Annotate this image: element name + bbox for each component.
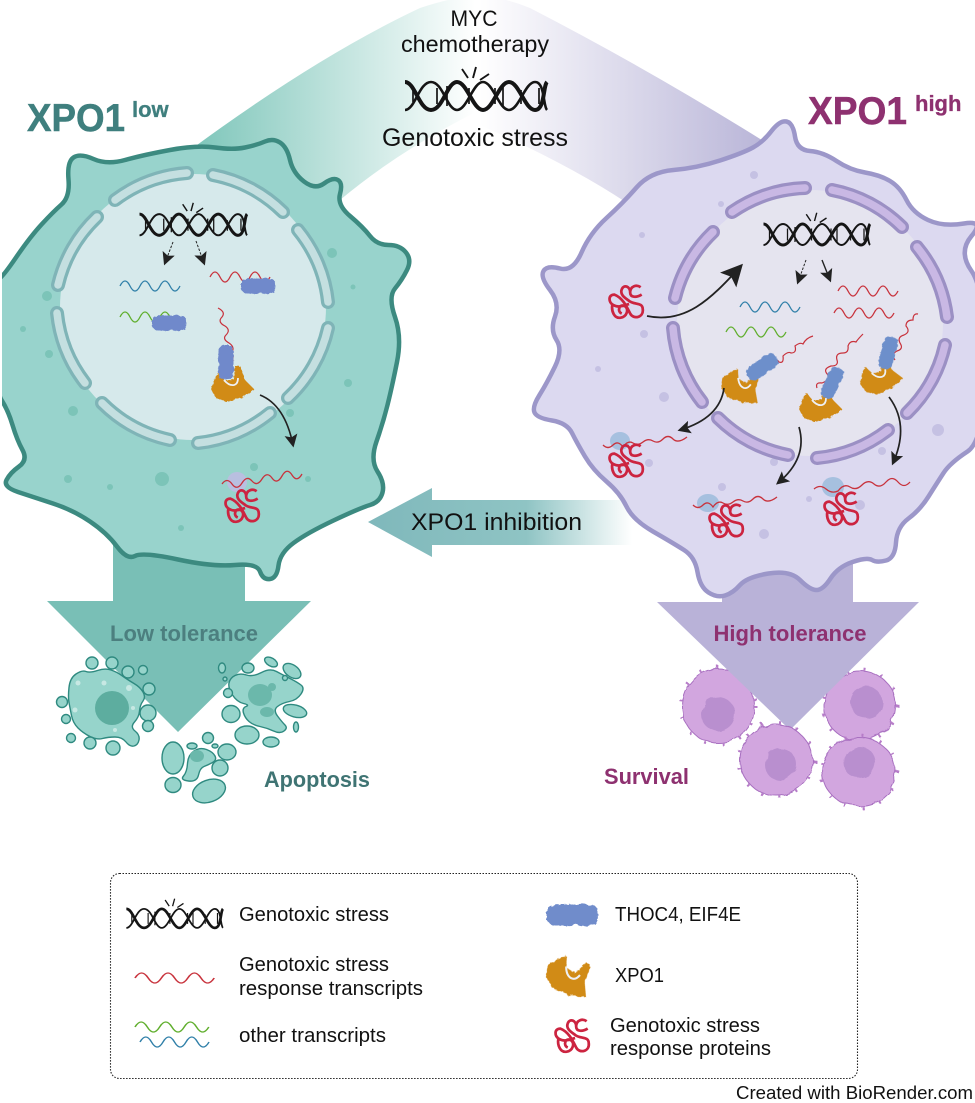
- icon: surviving cell 3: [738, 723, 814, 797]
- export complex 2: [799, 334, 863, 422]
- icon: surviving cell 1: [680, 667, 756, 745]
- label: High tolerance: High tolerance: [714, 621, 866, 646]
- cytoplasm vesicles: [595, 171, 944, 539]
- icon: apoptotic cell 3: [162, 732, 236, 807]
- title: XPO1 low: XPO1: [27, 97, 125, 140]
- label: Survival: Survival: [604, 764, 689, 789]
- title: XPO1 high: high: [915, 91, 961, 116]
- translated protein 3: [814, 477, 910, 525]
- icon: legend red transcript: [135, 973, 214, 983]
- stress band: teal arch to XPO1 low cell: [197, 0, 476, 200]
- legend text: THOC4, EIF4E: THOC4, EIF4E: [615, 904, 741, 926]
- heading: stress sources: [382, 6, 568, 152]
- icon: legend protein: [556, 1020, 589, 1052]
- arrow: XPO1 inhibition: XPO1 inhibition: [411, 509, 582, 536]
- translated protein 2: [693, 494, 777, 537]
- panel: XPO1 high cell: [534, 121, 975, 596]
- panel: XPO1 low cell: [0, 140, 409, 579]
- title: XPO1 high: XPO1: [808, 90, 907, 133]
- translated protein: [222, 471, 302, 522]
- arrows: export to cytoplasm: [680, 388, 901, 483]
- legend text: XPO1: XPO1: [615, 965, 664, 987]
- cell membrane: [0, 140, 409, 579]
- icon: damaged DNA (top): [405, 67, 547, 110]
- title: XPO1 low: low: [132, 97, 170, 122]
- heading: stress sources: Genotoxic stress: [382, 124, 568, 152]
- translated protein 1: [603, 432, 687, 477]
- export complex: [211, 308, 254, 402]
- protein feedback into nucleus: [610, 267, 740, 318]
- nucleus: [677, 190, 943, 456]
- cell membrane: [534, 121, 975, 596]
- dashed arrows from DNA: [165, 241, 204, 263]
- export complex 1: [715, 336, 813, 413]
- arrow: export to cytoplasm: [260, 395, 293, 445]
- stress band: lavender arch to XPO1 high cell: [480, 0, 765, 203]
- nuclear envelope: [673, 188, 947, 458]
- nuclear envelope: [57, 173, 328, 443]
- legend text: response transcripts: Genotoxic stress: [239, 954, 389, 976]
- legend text: Genotoxic stress: Genotoxic stress: [239, 904, 389, 926]
- icon: legend THOC4 EIF4E: [546, 904, 598, 926]
- legend text: response proteins: response proteins: [610, 1038, 771, 1060]
- arrows from DNA: [798, 260, 830, 282]
- cytoplasm vesicles: [20, 248, 356, 531]
- nucleus: [60, 174, 326, 440]
- arrow head: high tolerance: [657, 602, 919, 730]
- transcripts in nucleus: [726, 286, 898, 337]
- legend text: response transcripts: response transcripts: [239, 978, 423, 1000]
- legend text: response transcripts: [239, 954, 423, 1000]
- icon: legend other transcripts: [135, 1022, 209, 1047]
- icon: apoptotic cell 2: [218, 655, 308, 747]
- panel: legend: [110, 874, 858, 1078]
- arrow: XPO1 inhibition: [368, 488, 632, 557]
- legend text: other transcripts: other transcripts: [239, 1025, 386, 1047]
- icon: apoptotic cell 1: [56, 657, 156, 755]
- icon: damaged DNA: [140, 203, 247, 235]
- transcripts in nucleus: [120, 272, 275, 331]
- icon: surviving cell 4: [820, 736, 898, 808]
- legend text: response proteins: Genotoxic stress: [610, 1015, 760, 1037]
- label: Apoptosis: Apoptosis: [264, 767, 370, 792]
- export complex 3: [857, 314, 918, 397]
- heading: stress sources: MYC: [450, 6, 498, 31]
- legend text: response proteins: [610, 1015, 771, 1060]
- heading: stress sources: chemotherapy: [401, 31, 550, 57]
- icon: legend XPO1: [538, 945, 603, 1008]
- title: XPO1 high: [808, 90, 961, 133]
- icon: damaged DNA: [764, 213, 870, 245]
- label: Low tolerance: Low tolerance: [110, 621, 258, 646]
- icon: surviving cell 2: [822, 669, 898, 743]
- arrow: low tolerance: [47, 540, 311, 732]
- credit: Created with BioRender.com: [736, 1082, 973, 1103]
- icon: legend DNA: [126, 899, 223, 928]
- arrow: high tolerance shaft: [722, 540, 853, 602]
